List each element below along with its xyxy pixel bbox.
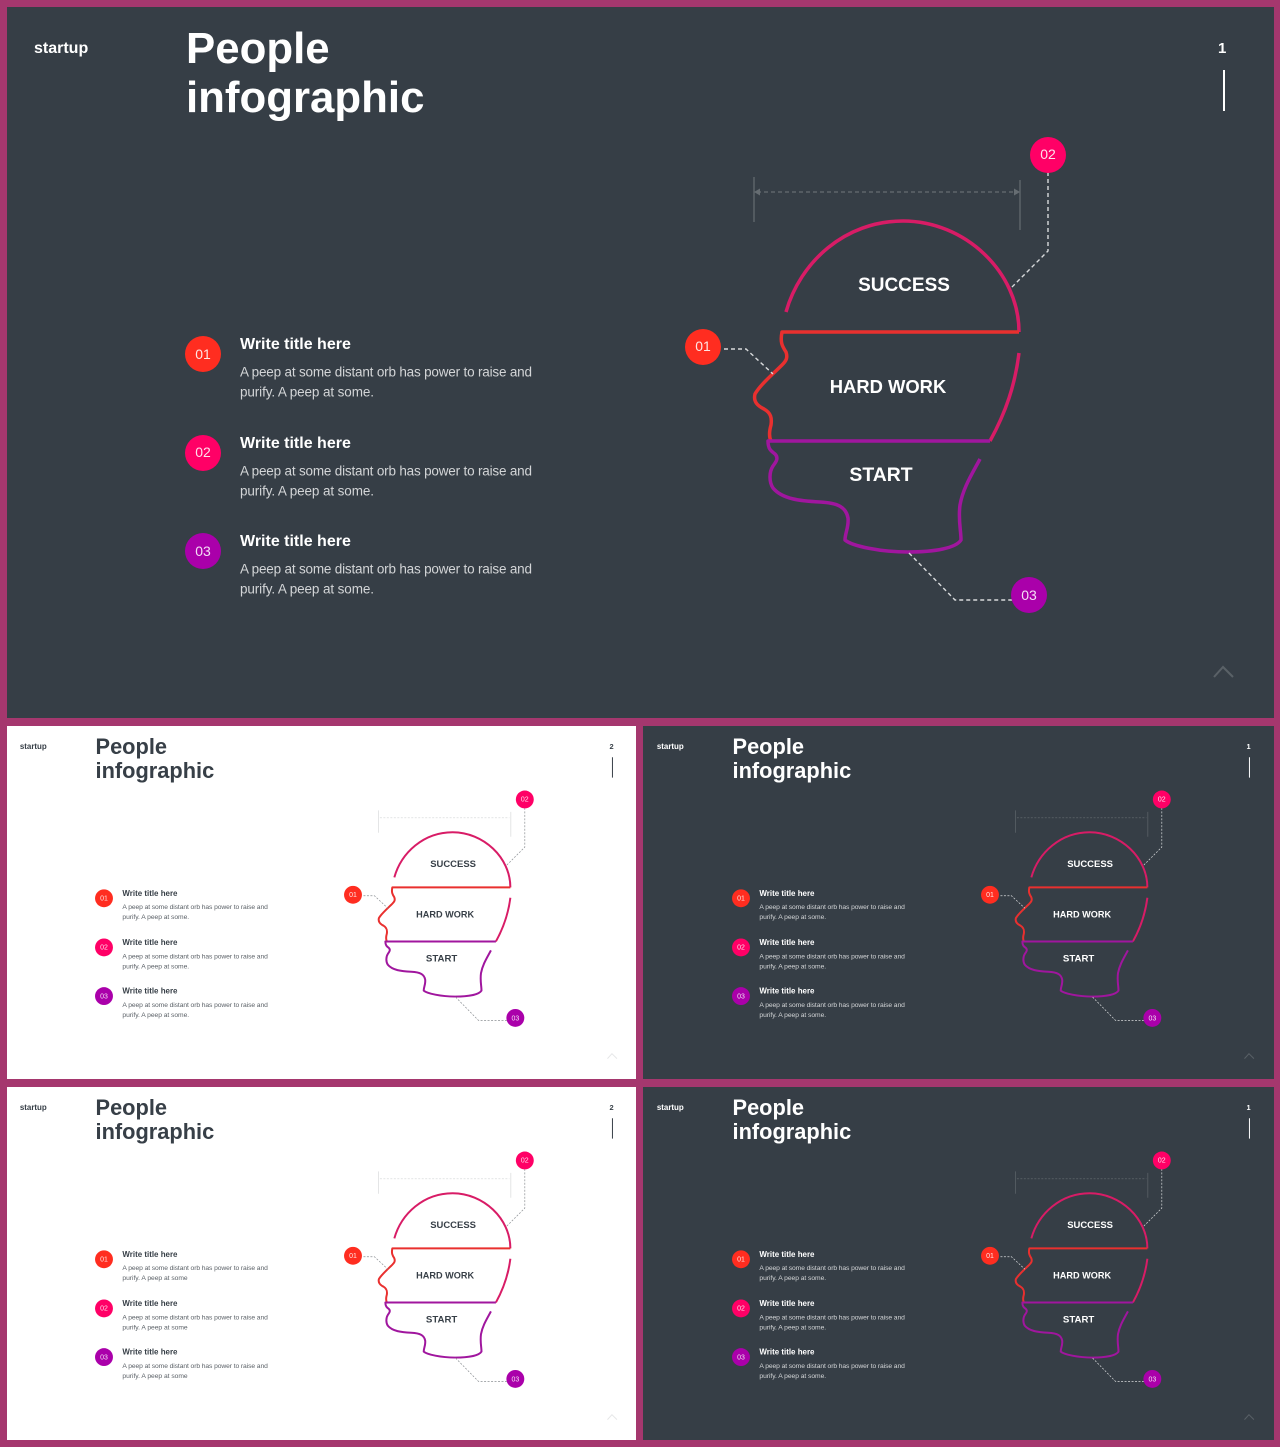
callout 03: 03 [1148,1015,1156,1022]
list item 02: 02 [100,944,108,951]
callout 02 [1143,791,1171,866]
callout 02: 02 [1158,796,1166,803]
list item 01: 01 [737,896,745,903]
panel: small white slide bottom left [7,1087,636,1440]
callout 02: 02 [521,1157,529,1164]
callout 02 [1143,1152,1171,1227]
list item 03: A peep at some distant orb has power to raise and [240,562,532,576]
section label: hard work: HARD WORK [830,376,947,397]
title: infographic [186,73,424,122]
callout 03 [456,1358,524,1388]
list item 02: 02 [100,1305,108,1312]
list item 02: A peep at some distant orb has power to raise and [759,1314,905,1321]
section label: start: START [1063,953,1094,964]
callout 03 [909,553,1047,613]
width dimension arrow [378,1171,511,1198]
section label: success: SUCCESS [430,1220,476,1231]
list item 02: Write title here [240,435,351,452]
list item 02 [95,1299,268,1331]
head outline [755,221,1019,552]
page number: 1 [1246,742,1251,751]
list item 01: A peep at some distant orb has power to raise and [122,904,268,911]
section label: start: START [1063,1314,1094,1325]
section label: start: START [426,953,457,964]
page rule [611,1118,613,1139]
list item 02 [732,1299,905,1331]
list item 03: purify. A peep at some [122,1373,188,1380]
page rule [1248,757,1250,778]
page number: 2 [609,1103,614,1112]
page number: 1 [1218,40,1226,57]
list item 01: purify. A peep at some [122,1275,188,1282]
callout 03: 03 [1148,1376,1156,1383]
title: People [733,1095,804,1120]
head outline [1016,1193,1147,1358]
list item 03: purify. A peep at some. [759,1012,826,1019]
list item 02: Write title here [122,1299,178,1308]
list item 02: 02 [737,1305,745,1312]
list item 01: Write title here [122,1250,178,1259]
section label: hard work: HARD WORK [1053,1271,1111,1281]
list item 02: purify. A peep at some. [759,1324,826,1331]
section label: success: SUCCESS [430,859,476,870]
list item 03: A peep at some distant orb has power to raise and [122,1363,268,1370]
callout 01: 01 [986,892,994,899]
list item 01: 01 [737,1257,745,1264]
list item 03: Write title here [759,987,815,996]
list item 02: purify. A peep at some. [759,963,826,970]
list item 01: A peep at some distant orb has power to raise and [122,1265,268,1272]
icon: up chevron [607,1054,617,1059]
list item 03: 03 [195,543,211,559]
callout 03: 03 [1021,587,1037,603]
callout 01 [344,1247,388,1269]
list item 01: Write title here [240,336,351,353]
brand label: startup [657,742,684,751]
list item 01: A peep at some distant orb has power to raise and [240,364,532,380]
list item 02: A peep at some distant orb has power to raise and [759,953,905,960]
icon: up chevron [1244,1054,1254,1059]
list item 03: 03 [737,1355,745,1362]
callout 02: 02 [521,796,529,803]
list item 03: Write title here [122,987,178,996]
section label: start: START [849,464,913,486]
title: People [733,734,804,759]
icon: up chevron [1214,667,1233,677]
list item 01: purify. A peep at some. [759,1275,826,1282]
list item 03: 03 [100,1355,108,1362]
list item 01: A peep at some distant orb has power to raise and [759,904,905,911]
page rule [611,757,613,778]
list item 01 [732,889,905,921]
section label: start: START [426,1314,457,1325]
head outline [379,1193,510,1358]
panel: small dark slide bottom right [643,1087,1274,1440]
title: infographic [733,1119,851,1144]
list item 03: Write title here [759,1348,815,1357]
panel: small dark slide top right [643,726,1274,1079]
list item 02: A peep at some distant orb has power to raise and [240,464,532,478]
list item 03: purify. A peep at some. [759,1373,826,1380]
list item 01 [732,1250,905,1282]
list item 03: purify. A peep at some. [122,1012,189,1019]
list item 01: purify. A peep at some. [122,914,189,921]
panel: small white slide top left [7,726,636,1079]
callout 01 [981,1247,1025,1269]
callout 01 [344,886,388,908]
icon: up chevron [1244,1415,1254,1420]
list item 03 [95,1348,268,1380]
list item 03: 03 [100,994,108,1001]
callout 01: 01 [695,338,711,354]
callout 02 [1010,137,1066,289]
title: infographic [733,758,851,783]
list item 02: Write title here [759,938,815,947]
callout 01: 01 [349,1253,357,1260]
callout 02 [506,791,534,866]
width dimension arrow [1015,810,1148,837]
list item 02 [732,938,905,970]
callout 01: 01 [986,1253,994,1260]
head outline [379,832,510,997]
callout 01: 01 [349,892,357,899]
list item 03 [185,533,532,596]
callout 03: 03 [511,1376,519,1383]
list item 03: 03 [737,994,745,1001]
icon: up chevron [607,1415,617,1420]
list item 01: 01 [100,1257,108,1264]
list item 02: A peep at some distant orb has power to raise and [122,1314,268,1321]
list item 03: purify. A peep at some. [240,582,374,596]
callout 03: 03 [511,1015,519,1022]
list item 02: Write title here [759,1299,815,1308]
callout 03 [1093,1358,1161,1388]
list item 01: purify. A peep at some. [759,914,826,921]
list item 01 [185,336,532,400]
list item 01 [95,1250,268,1282]
title: People [96,734,167,759]
list item 03: A peep at some distant orb has power to raise and [122,1002,268,1009]
list item 03: A peep at some distant orb has power to raise and [759,1363,905,1370]
title: infographic [96,758,214,783]
callout 01 [685,329,773,374]
list item 03: Write title here [240,533,351,550]
section label: success: SUCCESS [1067,859,1113,870]
panel: large dark slide [7,7,1274,718]
section label: hard work: HARD WORK [1053,910,1111,920]
list item 02 [185,435,532,498]
section label: hard work: HARD WORK [416,1271,474,1281]
list item 03 [732,1348,905,1380]
brand label: startup [20,1103,47,1112]
list item 03: Write title here [122,1348,178,1357]
list item 02: Write title here [122,938,178,947]
page number: 2 [609,742,614,751]
callout 03 [1093,997,1161,1027]
brand label: startup [20,742,47,751]
list item 03 [732,987,905,1019]
section label: success: SUCCESS [1067,1220,1113,1231]
list item 02: purify. A peep at some [122,1324,188,1331]
list item 02: A peep at some distant orb has power to raise and [122,953,268,960]
list item 01: A peep at some distant orb has power to raise and [759,1265,905,1272]
callout 03 [456,997,524,1027]
page rule [1248,1118,1250,1139]
list item 01: 01 [100,896,108,903]
head outline [1016,832,1147,997]
width dimension arrow [378,810,511,837]
callout 02: 02 [1040,146,1056,162]
list item 01: Write title here [759,889,815,898]
width dimension arrow [1015,1171,1148,1198]
brand label: startup [34,40,88,57]
list item 01: 01 [195,346,211,362]
list item 02: purify. A peep at some. [240,484,374,498]
brand label: startup [657,1103,684,1112]
page number: 1 [1246,1103,1251,1112]
list item 01: Write title here [122,889,178,898]
list item 02: purify. A peep at some. [122,963,189,970]
list item 03 [95,987,268,1019]
list item 02: 02 [737,944,745,951]
title: People [96,1095,167,1120]
list item 01: Write title here [759,1250,815,1259]
title: People [186,24,330,73]
list item 02: 02 [195,444,211,460]
list item 02 [95,938,268,970]
section label: hard work: HARD WORK [416,910,474,920]
page rule [1223,70,1225,111]
callout 02 [506,1152,534,1227]
callout 01 [981,886,1025,908]
list item 03: A peep at some distant orb has power to raise and [759,1002,905,1009]
callout 02: 02 [1158,1157,1166,1164]
list item 01: purify. A peep at some. [240,384,374,400]
width dimension arrow [754,177,1020,230]
list item 01 [95,889,268,921]
title: infographic [96,1119,214,1144]
section label: success: SUCCESS [858,275,950,296]
